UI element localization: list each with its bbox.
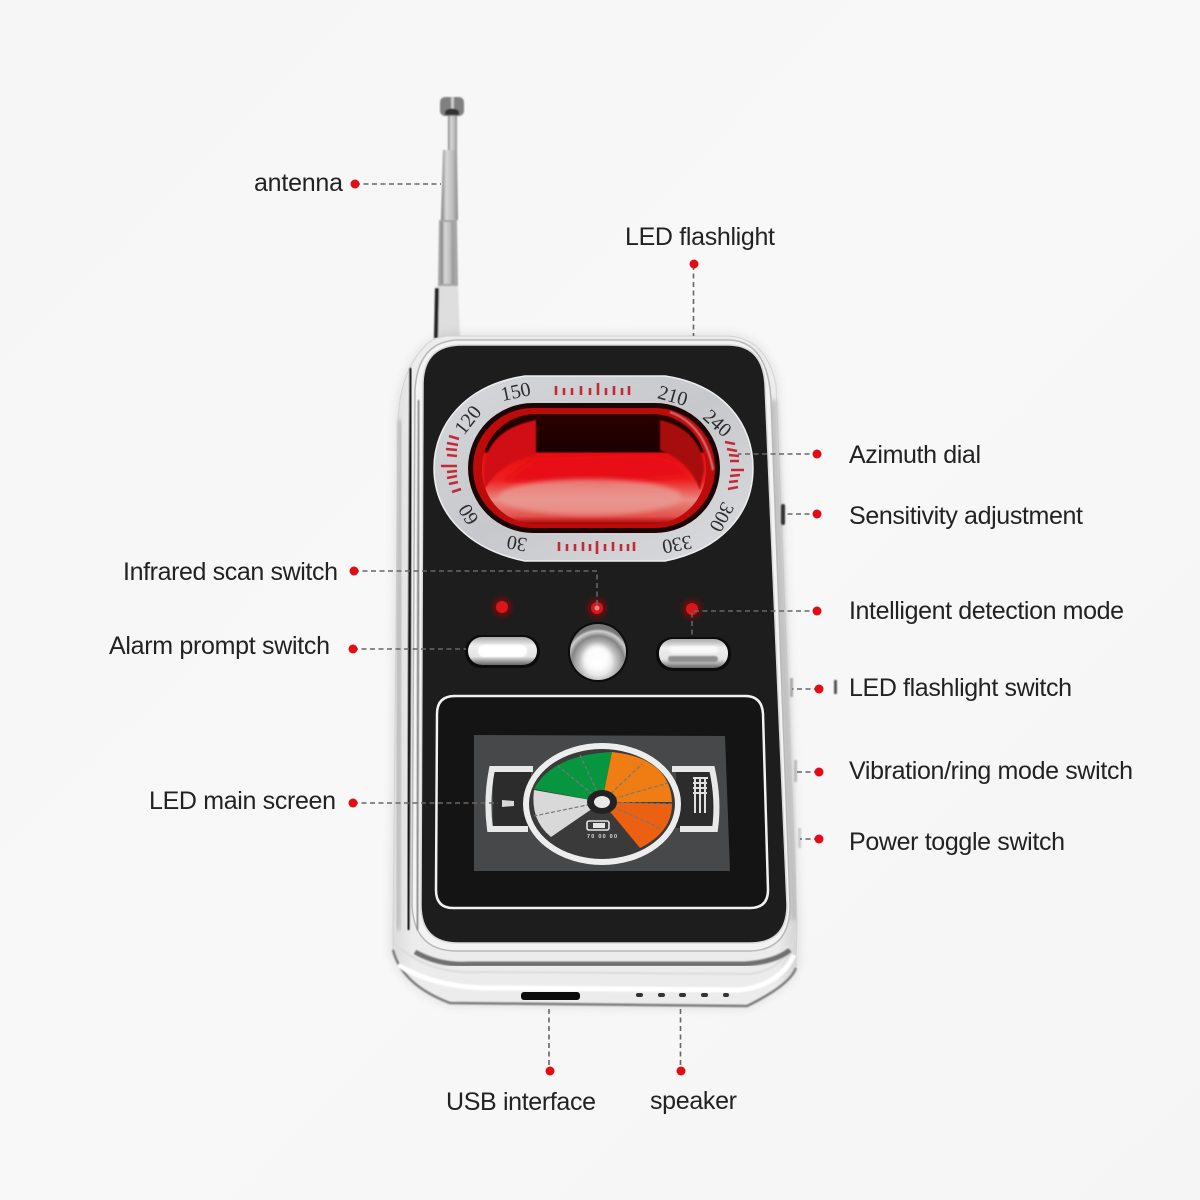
dial numbers: 60 xyxy=(454,500,484,528)
center round button xyxy=(568,622,628,682)
bars glyph xyxy=(693,778,708,813)
screen display xyxy=(474,735,730,871)
right button xyxy=(656,637,731,671)
part labels: antenna xyxy=(254,169,343,197)
dial ticks xyxy=(441,383,744,554)
side panel fills xyxy=(493,770,714,828)
part labels: LED main screen xyxy=(149,787,336,815)
grey sector xyxy=(533,790,602,837)
right side bracket xyxy=(672,769,716,829)
device photo xyxy=(392,97,837,1007)
USB port xyxy=(521,992,580,1000)
red lens xyxy=(468,403,720,533)
indicator LEDs xyxy=(492,597,702,619)
green sector xyxy=(534,752,612,802)
part labels: USB interface xyxy=(446,1088,596,1116)
side buttons xyxy=(781,504,837,848)
dial numbers: 330 xyxy=(660,530,694,557)
battery icon xyxy=(587,821,609,830)
part labels: Intelligent detection mode xyxy=(849,597,1124,625)
dial ring xyxy=(434,376,753,561)
black face plate xyxy=(421,345,787,943)
part labels: Alarm prompt switch xyxy=(109,632,330,660)
dial numbers: 210 xyxy=(655,382,690,411)
part labels: Vibration/ring mode switch xyxy=(849,757,1133,785)
antenna glyph xyxy=(502,800,514,807)
dial numbers: 120 xyxy=(450,402,486,439)
antenna xyxy=(434,97,464,338)
azimuth dial xyxy=(434,376,753,561)
part labels: LED flashlight switch xyxy=(849,674,1072,702)
LED main screen xyxy=(436,696,768,908)
dial numbers: 30 xyxy=(505,530,529,555)
dial numbers xyxy=(450,378,738,557)
screen bezel xyxy=(436,696,768,908)
part labels: Azimuth dial xyxy=(849,441,981,469)
orange sector xyxy=(602,752,672,802)
callout lines xyxy=(353,184,819,1070)
time readout: 70 00 00 xyxy=(587,834,617,840)
part labels: LED flashlight xyxy=(625,223,775,251)
control buttons xyxy=(465,622,731,682)
callout markers xyxy=(348,180,824,1076)
device body xyxy=(392,336,837,1007)
radar gauge xyxy=(526,746,678,862)
speaker holes xyxy=(636,993,729,997)
part labels: Infrared scan switch xyxy=(123,558,338,586)
part labels: Power toggle switch xyxy=(849,828,1065,856)
bottom chrome band xyxy=(415,950,790,964)
dark orange sector xyxy=(602,802,672,848)
part labels xyxy=(109,169,1133,1116)
dial numbers: 150 xyxy=(499,378,533,406)
left side bracket xyxy=(488,769,533,829)
dial numbers: 300 xyxy=(705,498,738,535)
part labels: speaker xyxy=(650,1087,737,1115)
dial numbers: 240 xyxy=(699,405,736,442)
gauge hub xyxy=(587,790,617,814)
left button xyxy=(465,635,540,668)
part labels: Sensitivity adjustment xyxy=(849,502,1083,530)
